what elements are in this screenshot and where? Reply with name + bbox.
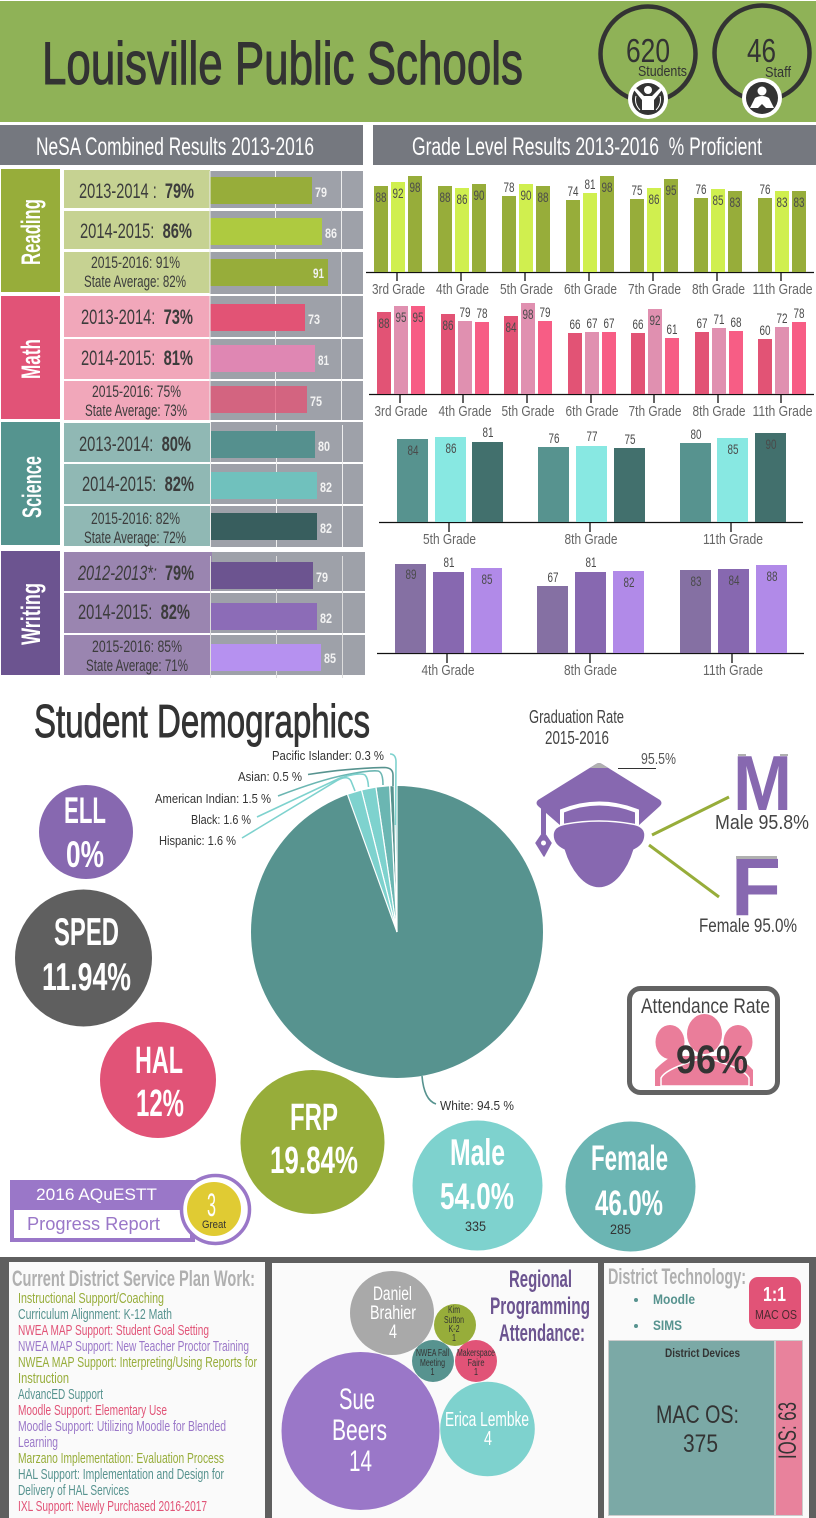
writing 8th grade: 8th Grade (564, 662, 617, 679)
bubble: Kim Sutton (434, 1304, 476, 1346)
reading 11th grade: 76 (760, 181, 771, 197)
math 11th grade: 60 (760, 322, 771, 338)
AQuESTT progress report badge: Progress Report (27, 1214, 160, 1234)
bubble: Kim Sutton: K-2 (448, 1324, 460, 1335)
panel: math combined results: 2015-2016: 75% (92, 382, 181, 401)
reading 5th grade: 88 (538, 189, 549, 205)
bubble: Sue Beers: Beers (332, 1414, 387, 1447)
math 6th grade (566, 315, 618, 420)
bubble: Erica Lembke: Erica Lembke (445, 1409, 529, 1431)
panel: reading combined results: 2015-2016: 91% (91, 253, 180, 272)
bubble: Kim Sutton: Kim (448, 1305, 460, 1316)
panel: science combined results (1, 422, 363, 547)
science 8th grade: 8th Grade (564, 531, 618, 548)
science 8th grade (538, 428, 645, 548)
math 7th grade: 66 (632, 316, 644, 332)
stat circle: SPED: 11.94% (42, 956, 131, 999)
graduation rate value: 95.5% (641, 751, 676, 768)
attendance rate callout (630, 988, 778, 1092)
reading 8th grade: 85 (712, 192, 724, 208)
bubble: NWEA Fall Meeting (412, 1340, 454, 1382)
reading 3rd grade (372, 176, 425, 298)
writing 4th grade: 89 (406, 566, 417, 582)
math 3rd grade (374, 306, 428, 420)
bubble: Sue Beers (282, 1352, 440, 1510)
panel: science combined results: 2015-2016: 82% (91, 509, 180, 528)
writing 4th grade: 85 (482, 571, 493, 587)
stat circle: SPED: SPED (54, 911, 119, 954)
stat circle: ELL (39, 785, 133, 879)
bubble: Daniel Brahier: Brahier (370, 1303, 417, 1324)
pie chart: student ethnicity (155, 748, 543, 1113)
reading 5th grade (500, 179, 553, 298)
title: Louisville Public Schools (42, 30, 523, 97)
service plan list: Moodle Support: Elementary Use (18, 1402, 167, 1419)
reading 4th grade: 90 (474, 187, 485, 203)
writing 11th grade (680, 565, 787, 679)
stat circle: female (566, 1122, 696, 1252)
reading 8th grade (692, 181, 745, 298)
panel: science combined results: Science (17, 456, 47, 518)
panel: reading combined results: 2013-2014 : 79% (79, 180, 194, 203)
math 7th grade: 7th Grade (628, 403, 682, 420)
math 4th grade: 4th Grade (438, 403, 492, 420)
writing 8th grade: 82 (624, 574, 635, 590)
panel: writing combined results: 82 (320, 610, 332, 626)
math 4th grade: 78 (476, 305, 488, 321)
writing 8th grade (537, 554, 644, 679)
stat circle: HAL: 12% (136, 1083, 184, 1125)
reading 3rd grade: 3rd Grade (372, 281, 425, 298)
reading 6th grade: 81 (584, 176, 596, 192)
panel: science combined results: 80 (318, 438, 330, 454)
bubble: NWEA Fall Meeting: Meeting (420, 1358, 445, 1369)
service plan list: HAL Support: Implementation and Design for (18, 1466, 224, 1483)
reading 11th grade (752, 181, 812, 298)
math 5th grade (502, 303, 554, 420)
service plan list: Instructional Support/Coaching (18, 1290, 164, 1307)
bubble: Makerspace Faire: Faire (468, 1358, 485, 1369)
students count badge (600, 6, 696, 119)
service plan list: AdvancED Support (18, 1386, 104, 1403)
bubble: Daniel Brahier: 4 (389, 1322, 397, 1343)
stat circle: FRP (240, 1070, 384, 1214)
panel: writing combined results (1, 551, 365, 678)
stat circle: HAL (100, 1022, 216, 1138)
panel: reading combined results: 91 (313, 265, 324, 281)
panel: reading combined results: Reading (16, 199, 46, 265)
panel: math combined results (1, 296, 363, 420)
science 11th grade: 90 (766, 436, 777, 452)
connector lines (649, 797, 729, 897)
math 7th grade: 61 (666, 321, 678, 337)
math 8th grade: 68 (730, 314, 742, 330)
reading 3rd grade: 92 (392, 185, 404, 201)
science 5th grade (397, 424, 503, 548)
stat circle: HAL: HAL (135, 1040, 183, 1082)
male graduation rate (715, 739, 809, 834)
AQuESTT progress report badge: Great (202, 1219, 226, 1231)
reading 5th grade: 78 (504, 179, 515, 195)
reading 8th grade: 8th Grade (692, 281, 745, 298)
service plan list: Curriculum Alignment: K-12 Math (18, 1306, 172, 1323)
treemap: district devices: MAC OS: (656, 1401, 739, 1429)
treemap: district devices: District Devices (665, 1346, 740, 1360)
math 3rd grade: 95 (412, 309, 424, 325)
panel: math combined results: 73 (308, 311, 320, 327)
panel: science combined results: 82 (320, 479, 332, 495)
panel: reading combined results: 79 (315, 184, 327, 200)
students count badge: 620 (626, 32, 670, 69)
staff count badge: Staff (765, 64, 792, 81)
AQuESTT progress report badge (10, 1176, 250, 1244)
stat circle: FRP: FRP (290, 1097, 338, 1139)
reading 8th grade: 83 (730, 194, 741, 210)
regional programming heading: Attendance: (499, 1320, 585, 1347)
reading 4th grade: 88 (440, 189, 451, 205)
math 4th grade: 79 (460, 304, 471, 320)
science 8th grade: 76 (548, 430, 560, 446)
panel: writing combined results: 2015-2016: 85% (92, 637, 182, 656)
stat circle: SPED (15, 890, 152, 1026)
icon: graduate with cap (536, 763, 662, 888)
reading 3rd grade: 98 (410, 179, 421, 195)
reading 4th grade: 4th Grade (436, 281, 489, 298)
reading 8th grade: 76 (696, 181, 707, 197)
service plan list: Moodle Support: Utilizing Moodle for Blended (18, 1418, 226, 1435)
callout: 1:1 MAC OS: MAC OS (755, 1307, 797, 1322)
stat circle: female: 46.0% (595, 1184, 663, 1223)
graduation rate value (618, 751, 676, 768)
treemap: district devices: 375 (683, 1430, 718, 1458)
stat circle: ELL: 0% (66, 834, 104, 875)
science 11th grade (680, 426, 786, 548)
panel: math combined results: State Average: 73% (85, 401, 187, 420)
math 6th grade: 67 (604, 315, 615, 331)
science 11th grade: 11th Grade (703, 531, 763, 548)
icon: people (655, 1014, 753, 1086)
reading 7th grade: 86 (648, 191, 660, 207)
panel: math combined results: 2014-2015: 81% (81, 347, 193, 370)
technology list: Moodle (653, 1291, 695, 1307)
service plan list: IXL Support: Newly Purchased 2016-2017 (18, 1498, 207, 1515)
technology list: SIMS (653, 1317, 682, 1333)
bottom band (0, 1257, 816, 1518)
panel: science combined results: 2014-2015: 82% (82, 473, 194, 496)
heading: student demographics: Student Demographics (34, 695, 370, 747)
panel: district technology (604, 1263, 809, 1518)
bubble: NWEA Fall Meeting: 1 (430, 1367, 435, 1378)
math 8th grade: 71 (714, 311, 725, 327)
pie labels (155, 748, 514, 1113)
stat circle: male: Male (450, 1132, 505, 1173)
staff count badge (714, 6, 810, 118)
writing 11th grade: 83 (690, 573, 702, 589)
pie labels: Asian: 0.5 % (238, 769, 302, 784)
science 5th grade: 5th Grade (423, 531, 476, 548)
math 11th grade (752, 305, 812, 420)
reading 4th grade: 86 (456, 191, 468, 207)
stat circle: ELL: ELL (64, 790, 106, 831)
heading: NeSA combined results: NeSA Combined Results 2013-2016 (36, 133, 314, 161)
math 11th grade: 78 (794, 305, 805, 321)
service plan list: Delivery of HAL Services (18, 1482, 129, 1499)
bubble: Sue Beers: 14 (349, 1445, 372, 1478)
pie labels: Black: 1.6 % (191, 812, 251, 827)
math 3rd grade: 88 (378, 315, 390, 331)
reading 6th grade: 98 (602, 179, 613, 195)
service plan list: Learning (18, 1434, 58, 1451)
pie labels: American Indian: 1.5 % (155, 791, 271, 806)
bar chart: math by grade (369, 303, 814, 420)
male graduation rate: M (733, 739, 792, 827)
panel: writing combined results: Writing (16, 583, 46, 645)
panel: regional programming attendance (272, 1263, 598, 1518)
math 7th grade: 92 (650, 312, 661, 328)
science 5th grade: 81 (482, 424, 494, 440)
math 6th grade: 66 (570, 316, 581, 332)
panel: writing combined results: 2012-2013*: 79% (77, 562, 194, 585)
reading 5th grade: 5th Grade (500, 281, 553, 298)
heading: grade level results (373, 125, 816, 165)
math 8th grade: 67 (696, 315, 708, 331)
writing 4th grade (395, 554, 502, 679)
reading 6th grade: 6th Grade (564, 281, 617, 298)
bubble: Kim Sutton: Sutton (444, 1315, 464, 1326)
panel: writing combined results: 2014-2015: 82% (78, 601, 190, 624)
reading 3rd grade: 88 (376, 189, 387, 205)
service plan list: NWEA MAP Support: Interpreting/Using Reports for (18, 1354, 257, 1371)
female graduation rate (699, 842, 797, 937)
bubble: Erica Lembke (440, 1382, 535, 1476)
regional programming heading (490, 1266, 590, 1347)
reading 7th grade: 95 (666, 182, 677, 198)
science 8th grade: 77 (586, 428, 598, 444)
panel: reading combined results: 86 (325, 225, 337, 241)
panel: reading combined results: State Average: 82% (84, 272, 186, 291)
panel: science combined results: 2013-2014: 80% (79, 433, 191, 456)
bubble: Kim Sutton: 1 (452, 1333, 456, 1344)
female graduation rate: F (731, 842, 781, 933)
panel: math combined results: 2013-2014: 73% (81, 306, 193, 329)
stat circle: male: 335 (465, 1218, 486, 1234)
panel: district technology: District Technology: (608, 1264, 746, 1289)
stat circle: male: 54.0% (440, 1176, 514, 1217)
panel: science combined results: 82 (320, 520, 332, 536)
math 4th grade: 86 (442, 317, 454, 333)
service plan list (18, 1290, 257, 1515)
panel: math combined results: Math (16, 339, 46, 379)
math 4th grade (438, 304, 492, 420)
math 6th grade: 67 (586, 315, 598, 331)
math 8th grade: 8th Grade (692, 403, 746, 420)
writing 11th grade: 84 (728, 572, 740, 588)
science 5th grade: 86 (446, 440, 457, 456)
reading 7th grade: 75 (632, 182, 643, 198)
pie labels: Pacific Islander: 0.3 % (272, 748, 384, 763)
reading 6th grade: 74 (568, 183, 579, 199)
panel: district service plan (9, 1262, 265, 1518)
bubble: NWEA Fall Meeting: NWEA Fall (416, 1348, 449, 1359)
bubble: Makerspace Faire: Makerspace (457, 1348, 495, 1359)
graduation rate heading: Graduation Rate (529, 707, 624, 727)
reading 11th grade: 83 (776, 194, 788, 210)
panel: district service plan: Current District Service Plan Work: (12, 1266, 255, 1291)
technology list (634, 1291, 695, 1333)
math 6th grade: 6th Grade (566, 403, 618, 420)
service plan list: Instruction (18, 1370, 69, 1387)
math 5th grade: 5th Grade (502, 403, 554, 420)
regional programming heading: Regional (509, 1266, 572, 1293)
staff count badge: 46 (747, 32, 776, 69)
stat circle: female: Female (591, 1139, 668, 1178)
pie labels: Hispanic: 1.6 % (159, 833, 236, 848)
writing 8th grade: 67 (548, 569, 559, 585)
attendance rate callout: Attendance Rate (641, 995, 770, 1018)
bubble: Daniel Brahier: Daniel (373, 1284, 412, 1305)
math 11th grade: 72 (776, 310, 788, 326)
regional programming heading: Programming (490, 1293, 590, 1320)
reading 7th grade (628, 179, 681, 298)
science 11th grade: 85 (728, 441, 739, 457)
treemap: district devices: IOS: 63 (774, 1402, 802, 1459)
writing 8th grade: 81 (586, 554, 597, 570)
panel: writing combined results: State Average: 71% (86, 656, 188, 675)
callout: 1:1 MAC OS: 1:1 (763, 1284, 786, 1306)
panel: math combined results: 81 (318, 352, 329, 368)
stat circle: male (412, 1120, 542, 1250)
service plan list: Marzano Implementation: Evaluation Process (18, 1450, 224, 1467)
callout: 1:1 MAC OS (749, 1277, 801, 1329)
math 5th grade: 84 (506, 319, 517, 335)
math 5th grade: 98 (522, 306, 534, 322)
heading: NeSA combined results (0, 125, 363, 165)
panel: reading combined results (1, 169, 363, 294)
science 8th grade: 75 (624, 431, 636, 447)
AQuESTT progress report badge: 3 (207, 1187, 216, 1223)
students count badge: Students (638, 63, 687, 80)
writing 4th grade: 81 (444, 554, 455, 570)
panel: math combined results: 75 (310, 393, 322, 409)
service plan list: NWEA MAP Support: New Teacher Proctor Training (18, 1338, 249, 1355)
reading 4th grade (436, 184, 489, 298)
science 11th grade: 80 (690, 426, 702, 442)
reading 5th grade: 90 (520, 187, 532, 203)
pie labels: White: 94.5 % (440, 1098, 514, 1113)
stat circle: FRP: 19.84% (270, 1140, 358, 1182)
math 3rd grade: 95 (396, 309, 407, 325)
writing 11th grade: 11th Grade (703, 662, 763, 679)
math 5th grade: 79 (540, 304, 551, 320)
AQuESTT progress report badge: 2016 AQuESTT (36, 1185, 157, 1204)
bubble: Makerspace Faire (455, 1340, 497, 1382)
panel: writing combined results: 85 (324, 650, 336, 666)
math 3rd grade: 3rd Grade (374, 403, 428, 420)
reading 7th grade: 7th Grade (628, 281, 681, 298)
graduation rate heading: 2015-2016 (545, 728, 609, 748)
graduation rate heading (529, 707, 624, 748)
math 7th grade (628, 309, 682, 420)
reading 11th grade: 83 (794, 194, 805, 210)
header banner (0, 1, 816, 122)
bar chart: science by grade (379, 424, 803, 548)
bar chart: writing by grade (377, 554, 804, 679)
reading 6th grade (564, 176, 617, 298)
science 5th grade: 84 (408, 442, 419, 458)
pie leader lines (242, 754, 436, 1104)
bar chart: reading by grade (366, 176, 814, 298)
panel: writing combined results: 79 (316, 569, 328, 585)
bubble: Sue Beers: Sue (339, 1383, 375, 1416)
bubble: Erica Lembke: 4 (484, 1428, 492, 1450)
writing 11th grade: 88 (766, 568, 778, 584)
bubble: Makerspace Faire: 1 (474, 1367, 478, 1378)
writing 4th grade: 4th Grade (422, 662, 474, 679)
math 8th grade (692, 311, 746, 420)
stat circle: female: 285 (610, 1221, 631, 1237)
panel: reading combined results: 2014-2015: 86% (80, 220, 192, 243)
panel: science combined results: State Average: 72% (84, 528, 186, 547)
attendance rate callout: 96% (676, 1038, 748, 1082)
bubble: Daniel Brahier (350, 1271, 434, 1355)
service plan list: NWEA MAP Support: Student Goal Setting (18, 1322, 209, 1339)
treemap: district devices (608, 1340, 803, 1516)
